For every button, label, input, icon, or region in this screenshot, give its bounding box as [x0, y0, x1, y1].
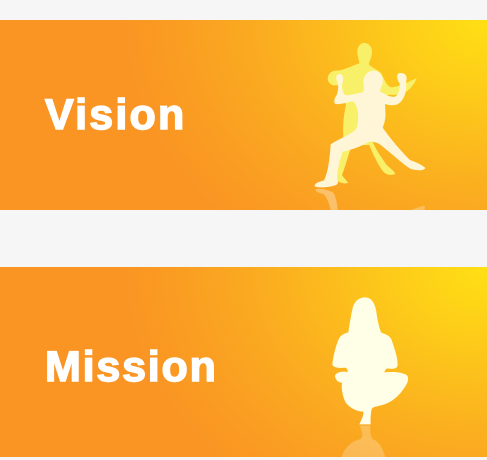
reflection — [315, 189, 338, 210]
heading: Vision: Vision — [45, 91, 186, 139]
front dancer — [315, 71, 425, 187]
panel: vision banner — [0, 20, 487, 210]
icon: meditating woman silhouette — [332, 297, 408, 457]
reflection — [342, 426, 385, 457]
seated figure — [332, 297, 408, 424]
heading: Mission: Mission — [45, 343, 218, 391]
panel: mission banner — [0, 267, 487, 457]
icon: dancing couple silhouette — [314, 43, 426, 210]
back dancer — [328, 43, 417, 183]
